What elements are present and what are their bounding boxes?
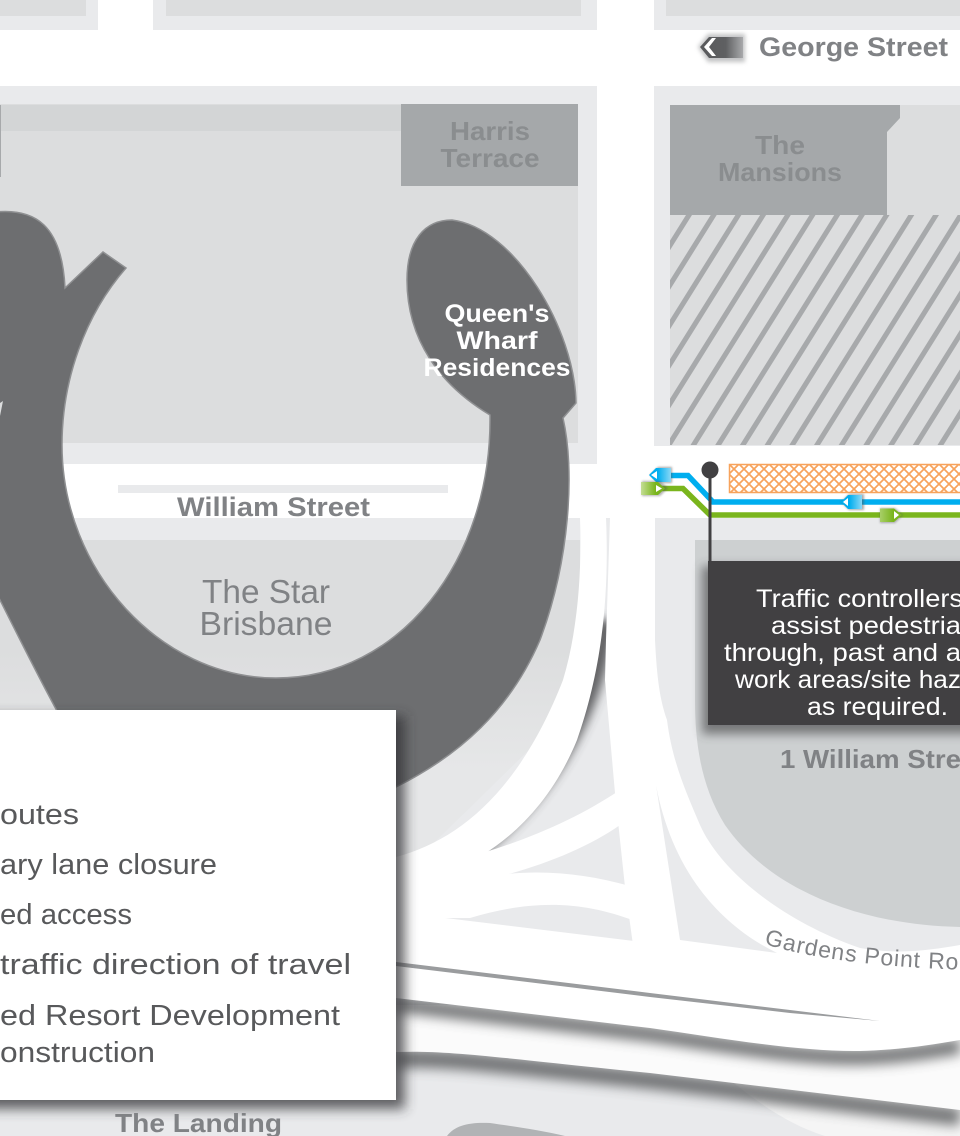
legend entries: outes <box>0 799 79 831</box>
label: William Street: William Street <box>177 492 370 522</box>
label: The Star Brisbane <box>200 573 332 642</box>
city block: top right <box>654 0 960 30</box>
callout box <box>708 561 960 725</box>
hatched temporary lane closure <box>730 464 960 492</box>
callout: traffic controllers <box>702 462 960 725</box>
road network <box>396 518 960 1136</box>
road: curved ramp <box>396 518 607 887</box>
road: lower carriageway <box>396 1005 960 1110</box>
building: Harris Terrace: Harris <box>450 116 530 146</box>
wedge between roads <box>656 785 777 953</box>
legend entries: ed Resort Development <box>0 1000 340 1032</box>
block: The Star Brisbane ground <box>0 540 580 880</box>
icon: blue arrow mid <box>841 494 864 510</box>
icon: George Street direction arrow <box>698 34 745 62</box>
label: 1 William Street: 1 William Stre <box>780 744 960 774</box>
slip road lower <box>396 872 635 921</box>
building: The Mansions <box>670 105 900 215</box>
callout text: work areas/site haz <box>734 666 960 694</box>
legend entries: traffic direction of travel <box>0 949 351 981</box>
icon: green arrow start <box>641 481 668 496</box>
city block: Queen's Wharf site <box>0 86 597 464</box>
callout pin <box>702 462 718 562</box>
road: upper and middle carriageways <box>396 912 960 1051</box>
lower right ground tint <box>723 1074 960 1136</box>
label: Queen's Wharf Residences <box>424 300 570 382</box>
green traffic route <box>648 488 960 515</box>
label: Gardens Point Road: Gardens Point Ro <box>766 930 958 970</box>
label: George Street with arrow <box>698 32 948 62</box>
callout text <box>724 585 960 721</box>
icon: blue arrow start <box>649 467 672 483</box>
legend shadow <box>0 716 405 1109</box>
callout text: as required. <box>807 693 948 721</box>
road: central column and Gardens Point curve <box>605 518 960 985</box>
callout text: through, past and a <box>724 639 960 667</box>
grey shape at bottom edge <box>447 1123 565 1136</box>
lane closure cross-hatch <box>730 464 960 492</box>
slip road upper <box>396 790 620 895</box>
label: Queen's Wharf Residences: Wharf <box>456 327 538 355</box>
icon: green arrow mid <box>880 508 903 523</box>
callout text: Traffic controllers <box>756 585 960 613</box>
label: The Star Brisbane: Brisbane <box>200 605 332 642</box>
legend entries: onstruction <box>0 1037 155 1069</box>
legend entries: ary lane closure <box>0 849 217 881</box>
legend box <box>0 710 396 1100</box>
road surface base south of William Street <box>0 518 960 1136</box>
street name: George Street: George Street <box>759 32 948 62</box>
city block: east of George Street <box>654 86 960 446</box>
legend entries: ed access <box>0 899 132 931</box>
building: The Mansions: The <box>755 130 805 160</box>
path for road label <box>764 944 960 970</box>
city block: top middle <box>153 0 597 30</box>
road shadow: middle carriageway <box>396 1004 960 1057</box>
label: The Star Brisbane: The Star <box>202 573 330 610</box>
hatched construction area <box>670 215 960 445</box>
callout text: assist pedestria <box>771 612 960 640</box>
building: Harris Terrace <box>401 104 578 186</box>
blue traffic route <box>652 476 960 502</box>
road shadow: curved ramp <box>396 620 604 895</box>
label: Queen's Wharf Residences: Residences <box>424 354 570 382</box>
label: Queen's Wharf Residences: Queen's <box>444 300 550 328</box>
William Street road bar <box>118 485 448 493</box>
tower footprint: Queen's Wharf Residences curved form <box>0 211 576 787</box>
gap between carriageways <box>396 962 880 1021</box>
legend entries <box>0 799 351 1069</box>
callout shadow <box>702 566 960 734</box>
city block: top left <box>0 0 98 30</box>
notch in tower footprint <box>0 401 3 416</box>
road shadow: lower carriageway <box>396 1059 960 1117</box>
ground: 1 William Street <box>695 540 960 927</box>
building: The Mansions: Mansions <box>718 157 842 187</box>
building: Harris Terrace: Terrace <box>440 143 540 173</box>
